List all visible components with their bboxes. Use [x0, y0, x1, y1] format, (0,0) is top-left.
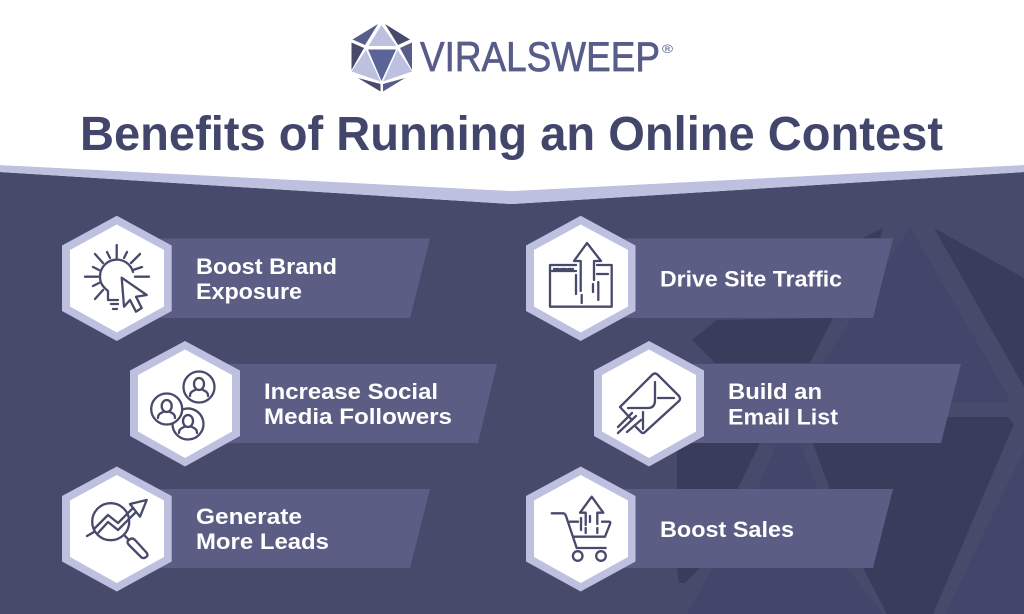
logo wordmark: VIRALSWEEP	[420, 33, 660, 80]
banner	[218, 364, 497, 443]
hexagon	[62, 466, 172, 592]
lavender chevron band	[0, 165, 1024, 204]
item: Build an Email List	[594, 341, 961, 466]
label: Increase Social	[264, 379, 438, 404]
hexagon	[526, 216, 636, 341]
item: Boost Sales	[526, 466, 893, 592]
hexagon	[62, 216, 172, 341]
label	[196, 254, 337, 304]
hexagon	[594, 341, 704, 466]
logo icon: polyhedron	[352, 24, 412, 92]
label: Generate	[196, 504, 302, 529]
icon: shopping cart with up arrow	[552, 497, 610, 561]
background pattern: large polyhedron	[677, 227, 1024, 614]
item: Boost Brand Exposure	[62, 216, 430, 341]
label: Drive Site Traffic	[660, 266, 842, 292]
label: Boost Sales	[660, 517, 794, 542]
banner	[150, 489, 430, 568]
banner	[682, 364, 961, 443]
icon: light bulb with cursor	[85, 245, 149, 312]
icon: browser window with up arrow	[550, 243, 612, 307]
item: Increase Social Media Followers	[130, 341, 497, 466]
banner	[614, 238, 893, 318]
label	[196, 504, 329, 554]
title: Benefits of Running an Online Contest	[80, 108, 943, 161]
dark lower background panel	[0, 172, 1024, 614]
logo	[352, 24, 673, 92]
banner	[150, 238, 430, 318]
hexagon	[130, 341, 240, 466]
label: Boost Brand	[196, 254, 337, 279]
white header background	[0, 0, 1024, 191]
item: Drive Site Traffic	[526, 216, 893, 341]
hexagon	[526, 466, 636, 592]
registered mark: ®	[662, 42, 673, 56]
item: Generate More Leads	[62, 466, 430, 592]
icon: three people	[151, 372, 214, 439]
icon: flying envelope	[618, 374, 680, 433]
label: Media Followers	[264, 404, 452, 429]
label	[728, 379, 839, 430]
banner	[614, 489, 893, 568]
icon: magnifier with trend arrow	[87, 500, 148, 558]
label: More Leads	[196, 529, 329, 554]
label	[264, 379, 452, 429]
label: Email List	[728, 404, 839, 430]
label: Build an	[728, 379, 822, 404]
label: Exposure	[196, 279, 302, 304]
